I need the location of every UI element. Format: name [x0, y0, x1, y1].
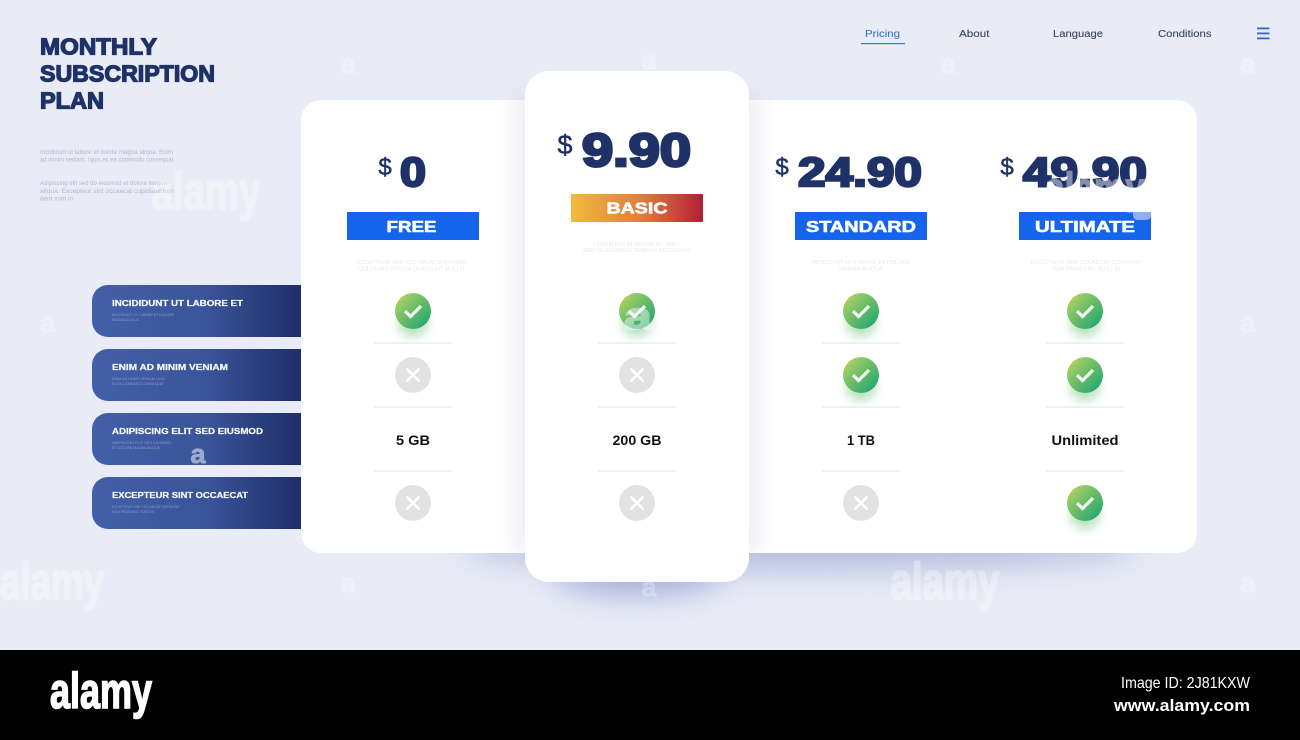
- feature row 3 storage values: 5 GB: [396, 433, 430, 448]
- plan: free: [347, 149, 479, 272]
- badge: basic: BASIC: [606, 200, 668, 218]
- title: [40, 34, 215, 114]
- price: ultimate: [1000, 149, 1147, 195]
- navigation: Language: [1053, 28, 1103, 40]
- plan note: standard: [812, 260, 910, 272]
- plan note: basic: SED DO EIUSMOD TEMPOR INCIDIDUNT: [583, 248, 692, 254]
- price: ultimate: 49.90: [1023, 149, 1147, 195]
- watermarks: a: [624, 296, 653, 338]
- watermarks: a: [190, 439, 206, 469]
- plan note: standard: MAGNA ALIQUA: [839, 266, 883, 272]
- watermarks: a: [940, 49, 956, 79]
- price: standard: 24.90: [798, 149, 922, 195]
- plan note: free: CULPA QUI OFFICIA DESERUNT MOLLIT: [359, 266, 466, 272]
- feature tab 2: EX EA COMMODO CONSEQUAT: [112, 381, 164, 386]
- feature tab 1: INCIDIDUNT UT LABORE ET DOLORE: [112, 312, 174, 317]
- watermarks: alamy: [890, 553, 1000, 611]
- navigation: [861, 28, 1212, 44]
- title: SUBSCRIPTION: [40, 60, 215, 86]
- price: standard: [775, 149, 922, 195]
- plan note: free: EXCEPTEUR SINT OCCAECAT CUPIDATAT: [357, 260, 468, 266]
- feature tab 4: NON PROIDENT, SUNT IN: [112, 509, 154, 514]
- plan note: free: [357, 260, 468, 272]
- badge: standard: STANDARD: [806, 219, 916, 236]
- badge: standard: [795, 212, 927, 240]
- feature tab 3: [92, 413, 301, 465]
- title: PLAN: [40, 88, 104, 114]
- price: ultimate: $: [1000, 154, 1014, 181]
- plan note: basic: [583, 242, 692, 254]
- title: MONTHLY: [40, 34, 157, 60]
- price: free: 0: [400, 149, 426, 195]
- footer logo: alamy: [50, 663, 152, 719]
- badge: ultimate: ULTIMATE: [1035, 219, 1135, 236]
- feature tab 4: EXCEPTEUR SINT OCCAECAT: [112, 491, 248, 500]
- feature tab 3: ET DOLORE MAGNA ALIQUA: [112, 445, 160, 450]
- center card side shadow: [513, 90, 761, 553]
- watermarks: alamy: [152, 163, 261, 221]
- footer bar: [0, 650, 1300, 740]
- watermarks: a: [1240, 568, 1256, 598]
- price: basic: 9.90: [582, 124, 691, 176]
- badge: ultimate: [1019, 212, 1151, 240]
- intro text: ad minim veniam. Iquis ex ea commodo consequat.: [40, 156, 175, 164]
- price: basic: [557, 124, 691, 176]
- price: basic: $: [557, 130, 573, 160]
- plan note: standard: INCIDIDUNT UT LABORE ET DOLORE: [812, 260, 910, 266]
- intro text: Incididunt ut labore et dolore magna aliqua. Enim: [40, 149, 173, 156]
- watermarks: alamy: [0, 553, 104, 611]
- icon: menu: [1257, 28, 1270, 39]
- feature tab 3: ADIPISCING ELIT SED EIUSMOD: [112, 440, 171, 445]
- feature tab 4: EXCEPTEUR SINT OCCAECAT CUPIDATAT: [112, 504, 180, 509]
- plan note: basic: LOREM IPSUM DOLOR SIT AMET: [594, 242, 681, 248]
- price: standard: $: [775, 154, 789, 181]
- feature row 3 storage values: 200 GB: [612, 433, 662, 448]
- price: free: $: [378, 154, 392, 181]
- feature row 4 icons: [395, 485, 1103, 529]
- watermarks: alamy: [1045, 164, 1145, 213]
- panel: main pricing card: [301, 100, 1197, 553]
- watermarks: a: [340, 49, 356, 79]
- intro text: dent sunt in: [40, 196, 73, 202]
- feature tab 2: ENIM AD MINIM VENIAM: [112, 363, 228, 372]
- intro text: aliqua. Excepteur sint occaecat cupidatat non: [40, 188, 174, 195]
- navigation: Pricing: [865, 28, 900, 40]
- feature tab 1: INCIDIDUNT UT LABORE ET: [112, 299, 243, 308]
- plan: basic: [557, 124, 703, 254]
- intro text: [40, 149, 175, 202]
- feature tab 2: [92, 349, 301, 401]
- feature tab 1: MAGNA ALIQUA: [112, 317, 139, 322]
- navigation: Conditions: [1158, 28, 1212, 40]
- feature tab 4: [92, 477, 301, 529]
- watermarks: a: [1240, 308, 1256, 338]
- card shadows: [460, 522, 1140, 594]
- price: free: [378, 149, 426, 195]
- panel: basic card: [525, 71, 749, 582]
- image id: Image ID: 2J81KXW: [1121, 675, 1251, 692]
- feature tab 1: [92, 285, 301, 337]
- feature row 2 icons: [395, 357, 1103, 401]
- watermarks: a: [340, 568, 356, 598]
- plan: standard: [775, 149, 927, 272]
- feature row 3 storage values: Unlimited: [1052, 433, 1118, 448]
- feature tab 2: ENIM AD MINIM VENIAM QUIS: [112, 376, 165, 381]
- watermarks: a: [1240, 49, 1256, 79]
- feature row 3 storage values: [396, 433, 1118, 448]
- watermarks: a: [40, 308, 56, 338]
- watermarks: [0, 45, 1256, 611]
- watermarks: a: [642, 45, 657, 75]
- panel: feature tabs: [92, 285, 301, 529]
- feature tab 3: ADIPISCING ELIT SED EIUSMOD: [112, 427, 263, 436]
- navigation: About: [959, 28, 990, 40]
- row dividers: [374, 342, 1124, 472]
- plan note: ultimate: EXCEPTEUR SINT OCCAECAT CUPIDATAT: [1031, 260, 1142, 266]
- feature row 1 icons: [395, 293, 1103, 337]
- plan note: ultimate: [1031, 260, 1142, 272]
- badge: free: FREE: [386, 219, 436, 236]
- intro text: Adipiscing elit sed do eiusmod et dolore magna: [40, 180, 167, 187]
- plan note: ultimate: NON PROIDENT, SUNT IN: [1052, 266, 1120, 272]
- badge: basic: [571, 194, 703, 222]
- plan: ultimate: [1000, 149, 1151, 272]
- watermarks: a: [642, 572, 657, 602]
- website: www.alamy.com: [1113, 696, 1250, 715]
- feature row 3 storage values: 1 TB: [847, 433, 875, 448]
